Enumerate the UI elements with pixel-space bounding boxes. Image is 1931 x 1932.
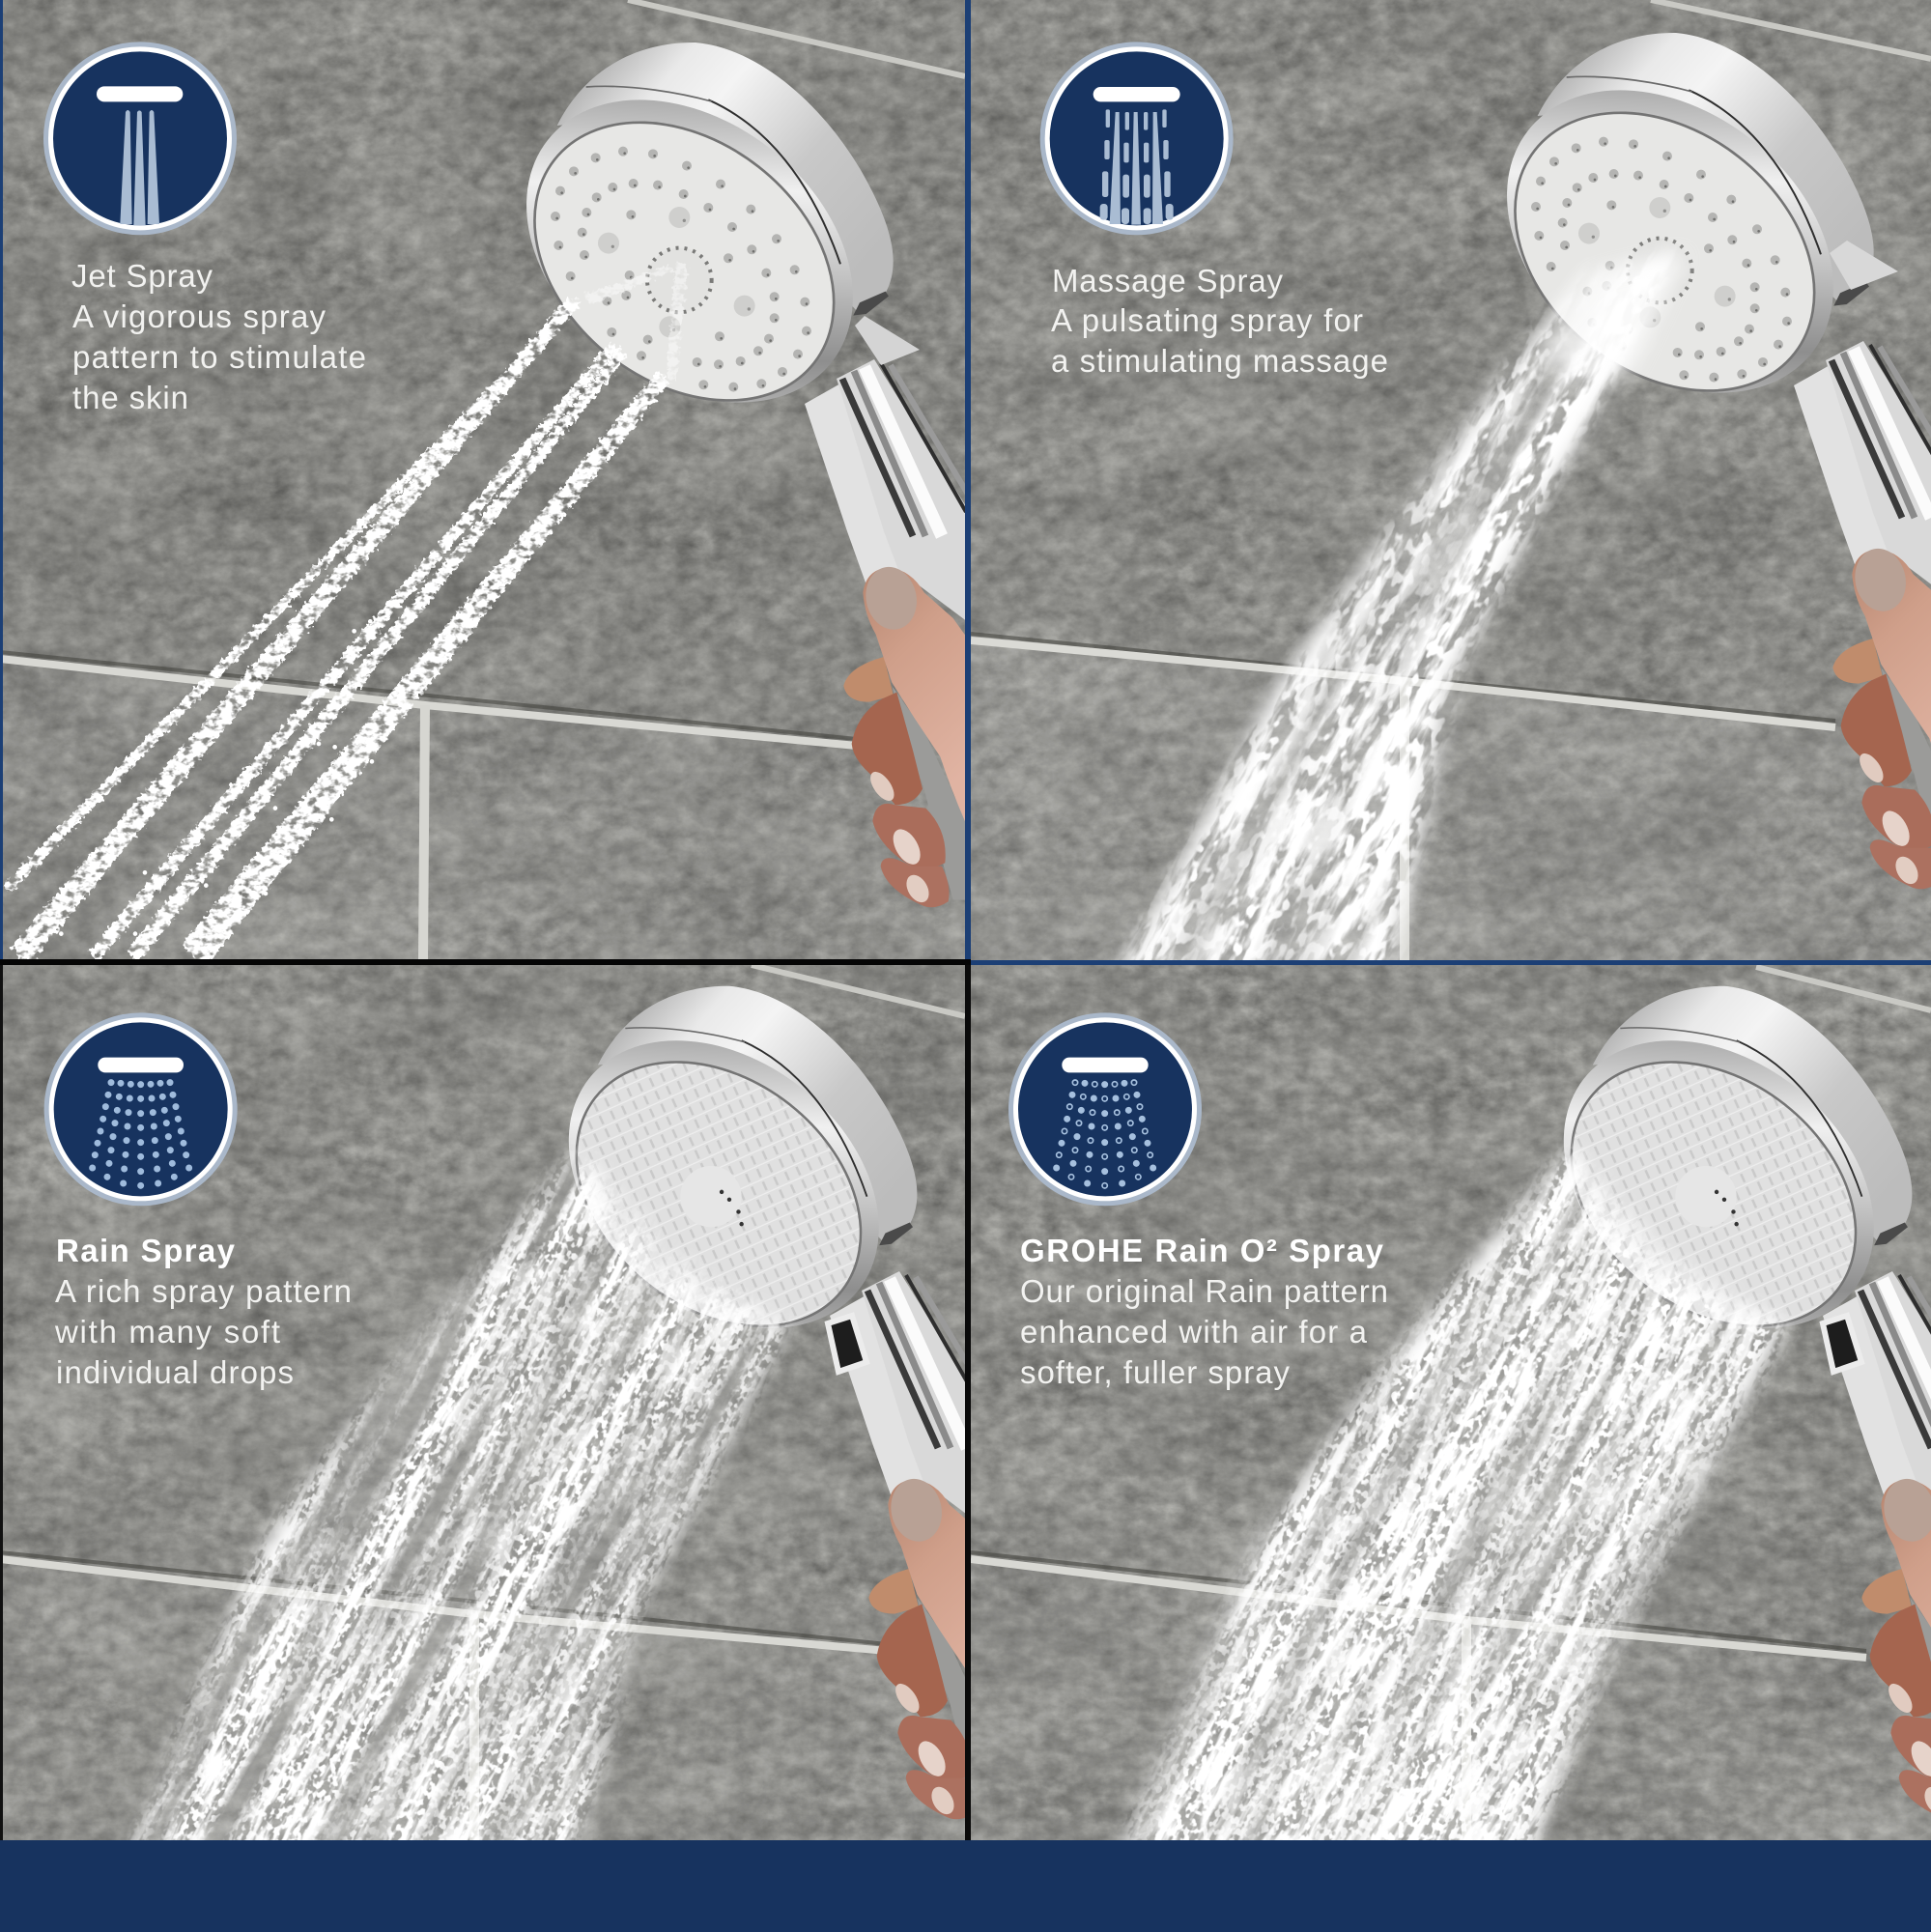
shower head: rain face xyxy=(525,1008,913,1380)
caption: rain spray: Rain Spray xyxy=(56,1233,236,1268)
caption: jet spray: Jet Spray xyxy=(71,258,213,294)
caption: massage spray xyxy=(1051,263,1388,379)
water: jet streams xyxy=(3,261,688,968)
concrete wall tile xyxy=(971,0,1931,960)
caption: jet spray: the skin xyxy=(72,380,188,415)
icon: rain O2 spray xyxy=(1008,1012,1202,1206)
icon: massage spray xyxy=(1040,42,1234,235)
handle xyxy=(1823,1271,1931,1540)
caption: massage spray: a stimulating massage xyxy=(1051,343,1388,379)
water: stray droplets xyxy=(41,621,372,934)
panel: GROHE Rain O2 spray xyxy=(971,965,1931,1840)
lower tiles xyxy=(971,1559,1931,1840)
tile grout lines xyxy=(971,967,1931,1840)
caption: jet spray: pattern to stimulate xyxy=(72,339,366,375)
water: rain spray xyxy=(0,965,965,1840)
tile grout lines xyxy=(0,0,965,959)
hand holding shower xyxy=(1832,544,1931,889)
selector tab xyxy=(855,316,920,365)
panel: rain spray xyxy=(0,965,1001,1840)
panel: jet spray xyxy=(0,0,976,968)
shower head: rain face xyxy=(1519,1008,1908,1380)
shower head: chrome body xyxy=(526,43,894,403)
caption: jet spray: A vigorous spray xyxy=(72,298,327,334)
caption: massage spray: Massage Spray xyxy=(1052,263,1283,298)
hand holding shower xyxy=(1861,1474,1931,1819)
caption: rain spray: individual drops xyxy=(56,1354,294,1390)
panel: massage spray xyxy=(971,0,1931,960)
selector clip xyxy=(1823,1316,1861,1372)
handle xyxy=(805,359,976,628)
selector tab xyxy=(1830,241,1898,290)
handle xyxy=(1794,341,1931,610)
shower head: chrome body xyxy=(513,981,935,1387)
caption: rain O2 spray: GROHE Rain O² Spray xyxy=(1020,1233,1384,1268)
caption: rain spray: with many soft xyxy=(54,1314,280,1350)
water: rain O2 spray xyxy=(971,965,1931,1840)
caption: jet spray xyxy=(71,258,366,415)
tile grout lines xyxy=(971,0,1931,960)
shower head: chrome body xyxy=(1508,981,1930,1387)
caption: rain spray xyxy=(54,1233,352,1390)
lower tiles xyxy=(0,1559,965,1840)
water: massage spray core xyxy=(1536,253,1686,382)
caption: rain O2 spray: Our original Rain pattern xyxy=(1020,1273,1388,1309)
hand holding shower xyxy=(868,1474,994,1819)
caption: rain O2 spray: enhanced with air for a xyxy=(1020,1314,1368,1350)
caption: rain spray: A rich spray pattern xyxy=(55,1273,352,1309)
shower head: chrome body xyxy=(1448,28,1892,455)
water: massage spray xyxy=(971,0,1931,960)
concrete wall tile xyxy=(971,965,1931,1840)
icon: jet spray xyxy=(43,42,237,235)
lower tiles xyxy=(6,666,833,933)
hand holding shower xyxy=(843,562,969,907)
selector clip xyxy=(828,1316,866,1372)
caption: rain O2 spray: softer, fuller spray xyxy=(1020,1354,1291,1390)
tile grout lines xyxy=(0,965,965,1840)
shower head: spray face xyxy=(1461,55,1869,448)
shower head: spray face xyxy=(533,122,835,402)
handle xyxy=(830,1271,1001,1540)
concrete wall tile xyxy=(0,965,965,1840)
concrete wall tile xyxy=(0,0,965,959)
icon: rain spray xyxy=(44,1012,238,1206)
lower tiles xyxy=(971,640,1931,960)
caption: massage spray: A pulsating spray for xyxy=(1051,302,1363,338)
caption: rain O2 spray xyxy=(1020,1233,1388,1390)
